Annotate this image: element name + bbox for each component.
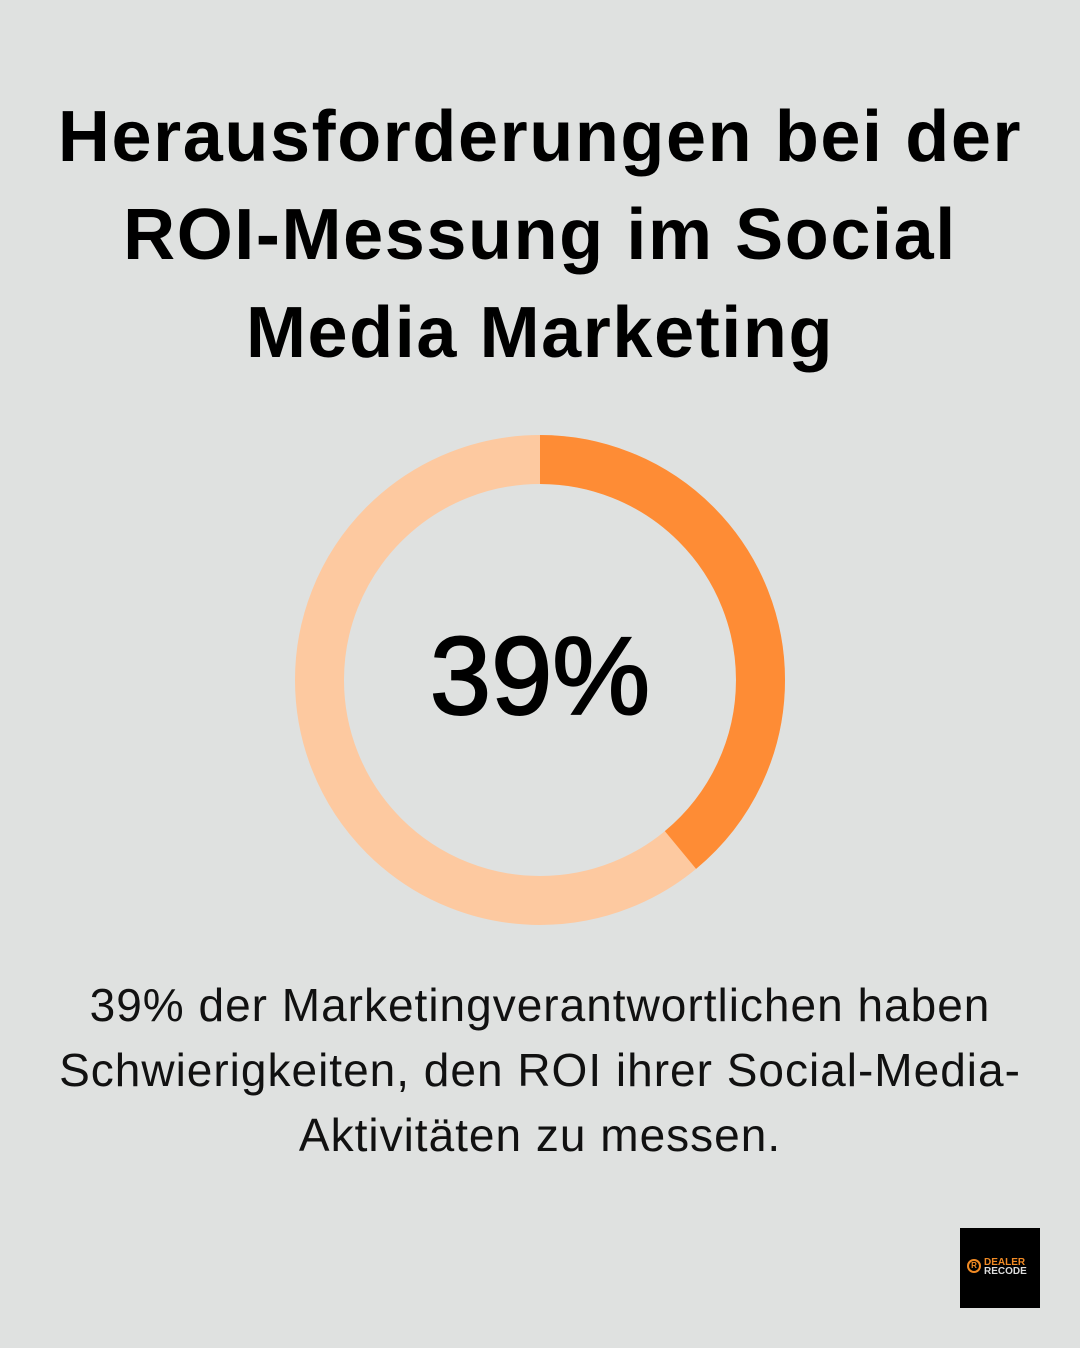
logo: R bbox=[971, 1261, 977, 1270]
logo: RECODE bbox=[984, 1266, 1027, 1277]
title: Media Marketing bbox=[246, 293, 834, 373]
title: Herausforderungen bei der bbox=[58, 97, 1022, 177]
description: Schwierigkeiten, den ROI ihrer Social-Media- bbox=[59, 1044, 1021, 1096]
logo: DEALER bbox=[984, 1257, 1025, 1268]
description bbox=[59, 979, 1021, 1161]
description: 39% der Marketingverantwortlichen haben bbox=[90, 979, 990, 1031]
logo bbox=[960, 1228, 1040, 1308]
donut chart: 39% bbox=[430, 615, 650, 738]
title: ROI-Messung im Social bbox=[123, 195, 957, 275]
description: Aktivitäten zu messen. bbox=[299, 1109, 781, 1161]
title bbox=[58, 97, 1022, 373]
